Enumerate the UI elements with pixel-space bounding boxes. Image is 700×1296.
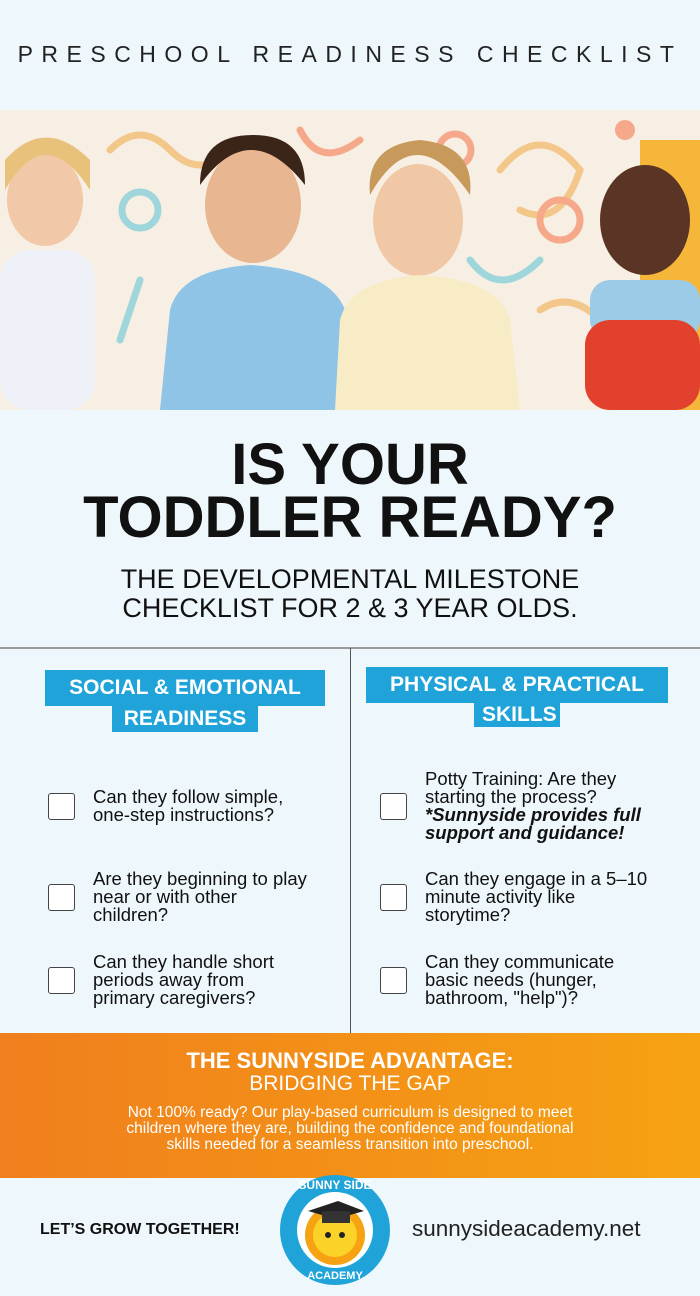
heading: physical [366, 667, 668, 727]
item 4 [380, 768, 642, 843]
heading: social: SOCIAL & EMOTIONAL [69, 676, 301, 699]
item 1 [48, 786, 283, 825]
item 6: Can they communicate [425, 951, 614, 972]
item 5: Can they engage in a 5–10 [425, 868, 647, 889]
heading: physical: PHYSICAL & PRACTICAL [390, 673, 644, 696]
orange banner: BRIDGING THE GAP [249, 1072, 451, 1095]
subtitle: CHECKLIST FOR 2 & 3 YEAR OLDS. [122, 593, 578, 623]
logo [280, 1175, 390, 1285]
headline: TODDLER READY? [83, 485, 617, 550]
item 1: one-step instructions? [93, 804, 274, 825]
subtitle: THE DEVELOPMENTAL MILESTONE [121, 564, 579, 594]
website: sunnysideacademy.net [412, 1216, 640, 1241]
heading: social [45, 670, 325, 732]
item 3 [48, 951, 274, 1008]
item 4: support and guidance! [425, 822, 624, 843]
item 2 [48, 868, 307, 925]
item 2: children? [93, 904, 168, 925]
heading: physical: SKILLS [482, 703, 557, 726]
item 2: near or with other [93, 886, 237, 907]
orange banner [0, 1033, 700, 1178]
panel: physical & practical [366, 667, 668, 1008]
item 6: basic needs (hunger, [425, 969, 597, 990]
item 5 [380, 868, 647, 925]
orange banner: skills needed for a seamless transition into preschool. [166, 1136, 534, 1153]
orange banner: THE SUNNYSIDE ADVANTAGE: [186, 1048, 514, 1073]
footer left text: LET’S GROW TOGETHER! [40, 1221, 240, 1238]
headline [83, 432, 617, 550]
logo: SUNNY SIDE [298, 1178, 372, 1192]
item 6: bathroom, "help")? [425, 987, 578, 1008]
item 3: Can they handle short [93, 951, 274, 972]
heading: social: READINESS [124, 707, 246, 730]
item 4: Potty Training: Are they [425, 768, 616, 789]
item 4: *Sunnyside provides full [425, 804, 641, 825]
panel: social & emotional [45, 670, 325, 1008]
orange banner: children where they are, building the confidence and foundational [126, 1120, 574, 1137]
item 2: Are they beginning to play [93, 868, 307, 889]
logo: ACADEMY [307, 1270, 363, 1282]
item 5: storytime? [425, 904, 510, 925]
item 3: primary caregivers? [93, 987, 255, 1008]
item 6 [380, 951, 614, 1008]
orange banner: Not 100% ready? Our play-based curriculum is designed to meet [128, 1104, 572, 1121]
subtitle [121, 564, 579, 623]
item 4: starting the process? [425, 786, 597, 807]
item 3: periods away from [93, 969, 244, 990]
item 1: Can they follow simple, [93, 786, 283, 807]
title: PRESCHOOL READINESS CHECKLIST [18, 41, 682, 67]
headline: IS YOUR [231, 432, 469, 497]
photo: children [0, 110, 700, 410]
item 5: minute activity like [425, 886, 575, 907]
